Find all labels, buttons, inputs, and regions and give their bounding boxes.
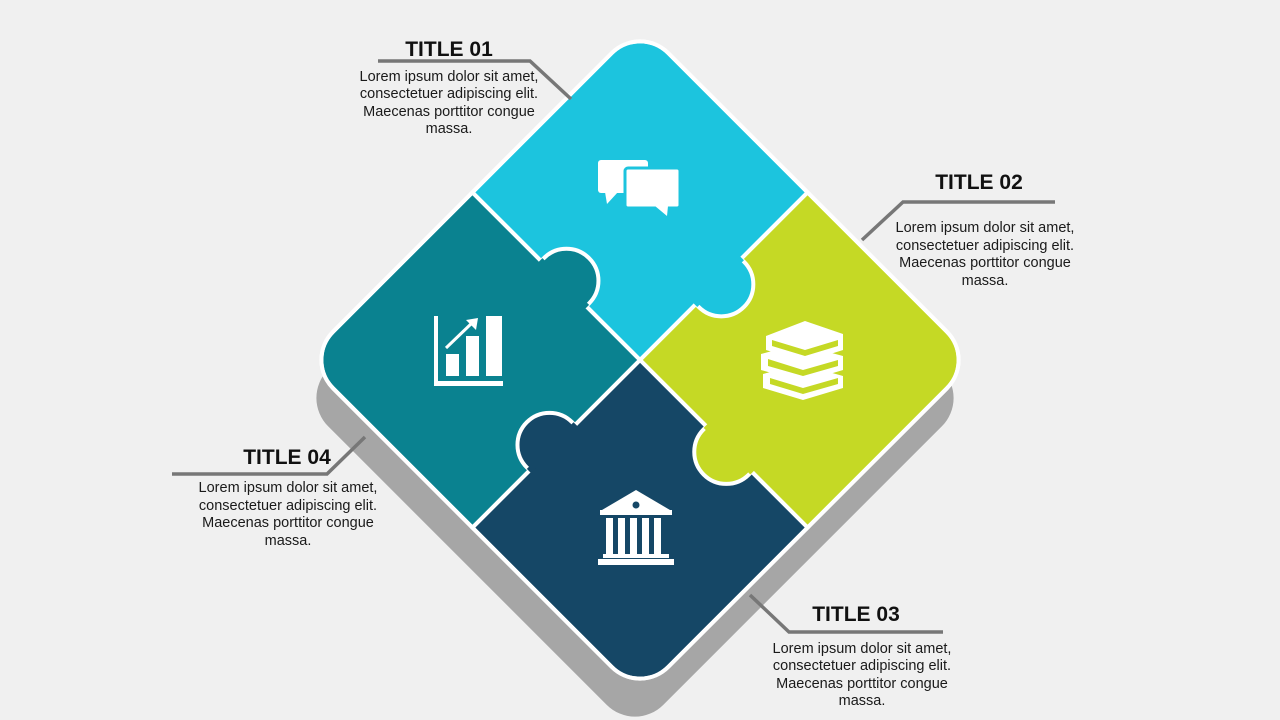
callout: title 01: Lorem ipsum dolor sit amet, (360, 69, 538, 85)
knob: teal into cyan (538, 246, 600, 309)
piece: top cyan (472, 25, 808, 360)
callout: title 04: Lorem ipsum dolor sit amet, (199, 480, 377, 496)
callout: title 04 (172, 437, 377, 549)
callout: title 02: Maecenas porttitor congue (899, 255, 1071, 271)
callout: title 04: consectetuer adipiscing elit. (199, 498, 377, 514)
piece: bottom navy (472, 360, 808, 695)
callout: title 03: consectetuer adipiscing elit. (773, 658, 951, 674)
callout: title 04: TITLE 04 (243, 446, 331, 469)
callout: title 01: TITLE 01 (405, 38, 493, 61)
callout: title 03: massa. (839, 693, 885, 709)
callout: title 04: massa. (265, 533, 311, 549)
callout: title 01: consectetuer adipiscing elit. (360, 86, 538, 102)
puzzle diamond (305, 25, 975, 695)
icon: chat bubbles (598, 160, 680, 216)
knob: navy into teal (516, 410, 578, 473)
knob: cyan into lime (694, 256, 756, 318)
callout: title 02 (862, 171, 1074, 289)
icon: bar chart (434, 316, 503, 386)
callout: title 03: Maecenas porttitor congue (776, 676, 948, 692)
callout: title 02: TITLE 02 (935, 171, 1023, 194)
piece: left teal (305, 192, 640, 528)
callout: title 02: consectetuer adipiscing elit. (896, 238, 1074, 254)
shadow (300, 63, 970, 720)
callout: title 03: Lorem ipsum dolor sit amet, (773, 641, 951, 657)
piece: right lime (640, 192, 975, 528)
callout: title 02: massa. (962, 273, 1008, 289)
callout: title 03: TITLE 03 (812, 603, 900, 626)
callout: title 01: massa. (426, 121, 472, 137)
callout: title 01 (360, 38, 571, 137)
callout: title 01: Maecenas porttitor congue (363, 104, 535, 120)
icon: books (761, 321, 843, 400)
callout: title 03 (750, 595, 951, 709)
callout: title 02: Lorem ipsum dolor sit amet, (896, 220, 1074, 236)
icon: bank building (598, 490, 674, 565)
callout: title 04: Maecenas porttitor congue (202, 515, 374, 531)
knob: lime into navy (692, 424, 754, 486)
